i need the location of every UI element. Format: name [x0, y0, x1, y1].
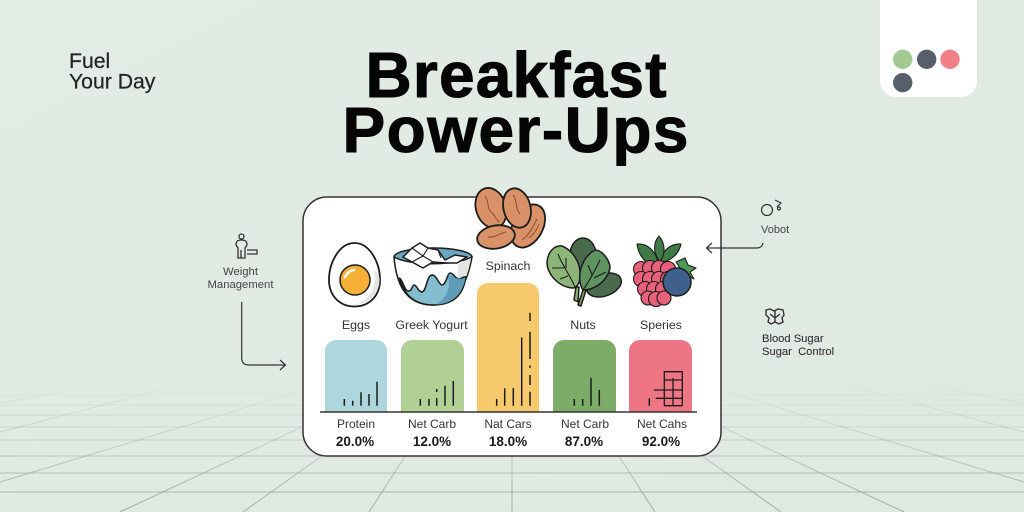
metric values: 92.0% [642, 434, 680, 449]
icon: spinach leaves [547, 238, 625, 306]
label: vobot: Vobot [761, 224, 789, 236]
label: blood sugar control: Sugar Control [762, 346, 834, 358]
metric labels: Net Carb [408, 417, 456, 431]
label: weight management [208, 266, 274, 291]
metric labels: Protein [337, 417, 375, 431]
label: blood sugar control: Blood Sugar [762, 333, 824, 345]
metric labels: Nat Cars [484, 417, 532, 431]
icon: raspberry and blueberry [634, 236, 696, 306]
arrow: vobot to chart [706, 243, 763, 253]
icon: vobot [762, 200, 781, 216]
food labels: Greek Yogurt [395, 318, 468, 332]
bar chart [320, 283, 697, 412]
label: weight management: Weight [223, 266, 259, 278]
metric labels [337, 417, 687, 431]
metric values: 12.0% [413, 434, 451, 449]
title: Breakfast [366, 39, 666, 111]
metric labels: Net Cahs [637, 417, 687, 431]
food labels: Eggs [342, 318, 370, 332]
title [342, 39, 688, 166]
food labels: Speries [640, 318, 682, 332]
metric values: 87.0% [565, 434, 603, 449]
panel: palette card [880, 0, 977, 97]
label: weight management: Management [208, 279, 274, 291]
food labels: Spinach [486, 259, 530, 273]
label: blood sugar control [762, 333, 834, 358]
tagline [69, 50, 156, 94]
metric values [336, 434, 680, 449]
food labels: Nuts [570, 318, 596, 332]
icon: egg [329, 243, 380, 306]
icon: nuts [470, 184, 552, 253]
arrow: weight management to chart [242, 302, 286, 370]
metric values: 20.0% [336, 434, 374, 449]
metric values: 18.0% [489, 434, 527, 449]
title: Power-Ups [342, 94, 688, 166]
tagline: Fuel [69, 50, 110, 73]
panel: food chart card [303, 197, 721, 456]
icon: blood sugar [766, 309, 784, 324]
icon: weight management [236, 234, 257, 258]
tagline: Your Day [69, 70, 156, 94]
metric labels: Net Carb [561, 417, 609, 431]
food labels [342, 259, 682, 332]
icon: yogurt bowl [394, 243, 472, 305]
